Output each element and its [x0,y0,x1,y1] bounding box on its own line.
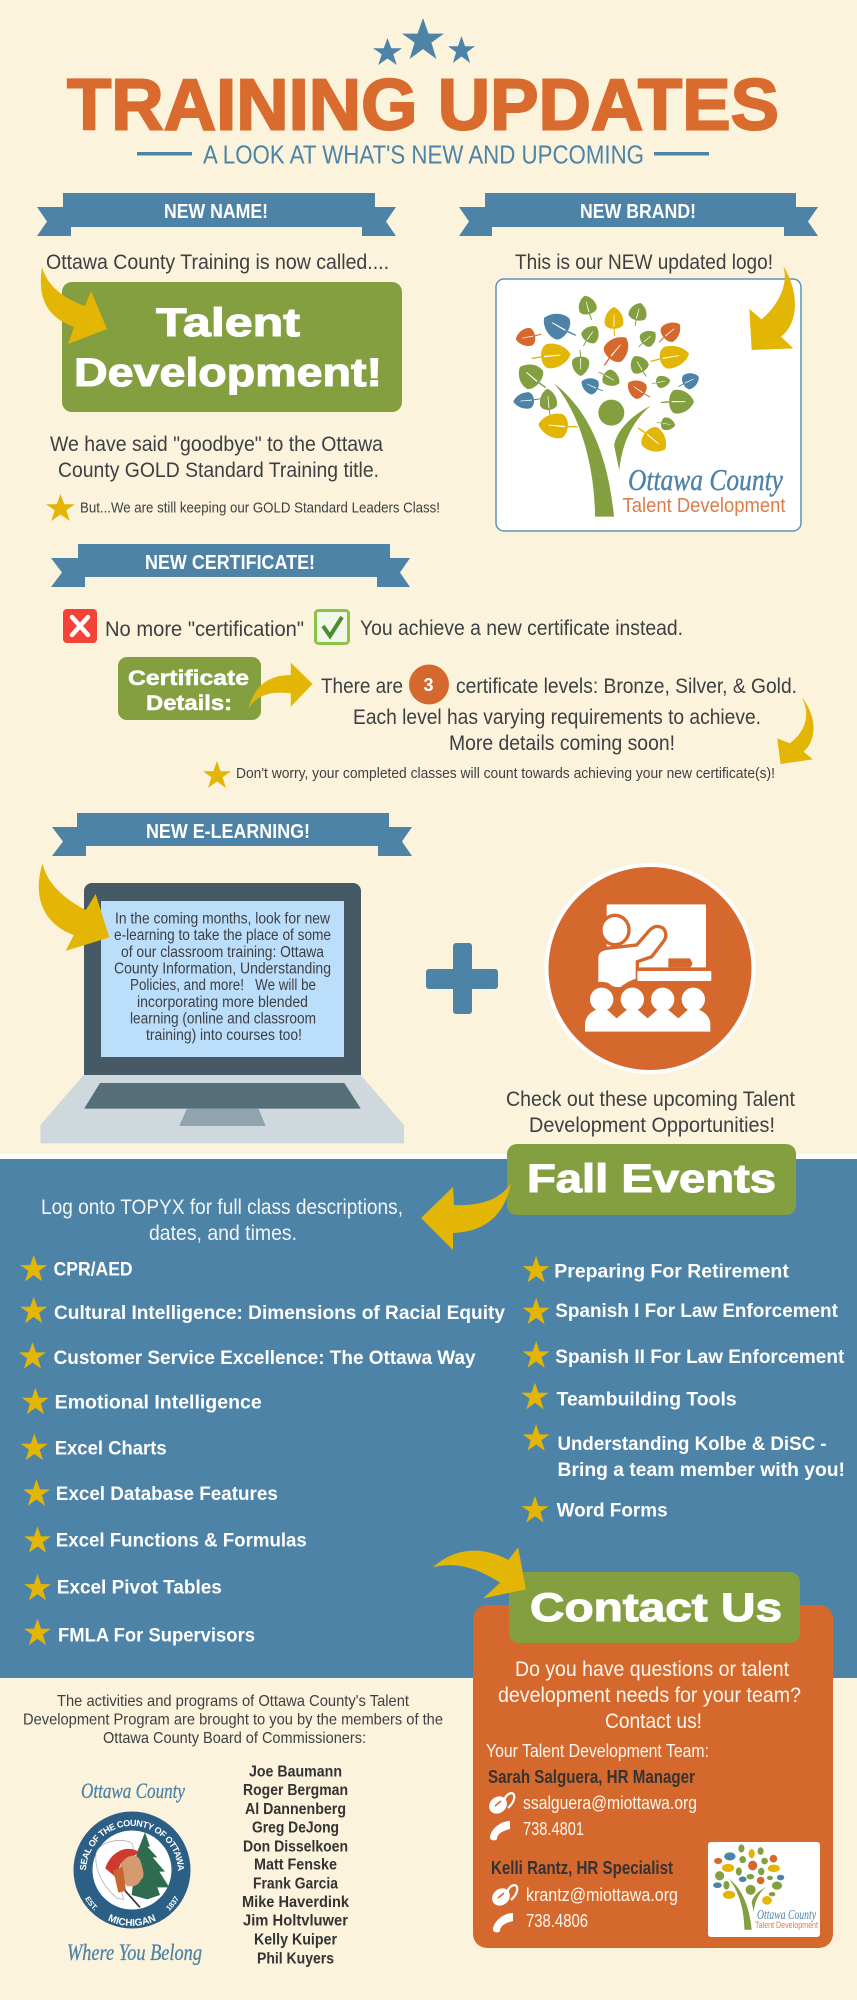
banner: new certificate [51,544,410,587]
heading: fall events: Fall Events [527,1157,776,1201]
text: no more certification: No more "certification" [105,618,304,641]
contact: sarah salguera: 738.4801 [523,1819,584,1839]
list: commissioners: Joe Baumann [249,1763,342,1780]
list: left column events: Excel Pivot Tables [57,1577,222,1598]
banner: new e-learning [52,813,412,856]
arrow: to laptop screen [39,863,109,951]
arrow: to logo [749,266,795,350]
text: program credit [23,1693,443,1747]
list: commissioners: Al Dannenberg [245,1801,346,1818]
list: commissioners: Don Disselkoen [243,1838,348,1855]
laptop illustration [40,883,404,1143]
logo tree [512,293,702,517]
contact: kelli rantz [489,1858,678,1932]
contact: sarah salguera: ssalguera@miottawa.org [523,1793,697,1813]
badge: 3: 3 [424,675,434,695]
green box: certificate details [118,657,261,720]
text: program credit: Development Program are brought to you by the members of the [23,1712,443,1728]
small logo card [708,1842,820,1937]
text: check out upcoming [506,1088,795,1137]
icon: three stars [373,18,475,65]
contact: kelli rantz: krantz@miottawa.org [526,1885,678,1905]
list: commissioners: Phil Kuyers [257,1950,334,1967]
panel: new certificate [51,544,814,788]
seal of ottawa county: EST. [85,1896,98,1911]
seal of ottawa county: 1837 [166,1896,178,1911]
text: contact question: Do you have questions or talent [515,1658,789,1681]
list: left column events: Excel Database Features [56,1484,278,1505]
text: certificate levels: certificate levels: Bronze, Silver, & Gold. [456,675,797,698]
contact: kelli rantz: Kelli Rantz, HR Specialist [491,1858,673,1878]
text: goodbye: We have said "goodbye" to the Ottawa [50,433,383,456]
banner: new name: NEW NAME! [164,201,268,223]
panel: board of commissioners footer [23,1693,443,1967]
list: right column events: Spanish II For Law Enforcement [555,1347,845,1368]
green box: certificate details: Certificate [128,667,249,690]
laptop screen text: Policies, and more! We will be [130,977,316,994]
icon: red x [63,609,97,643]
intro text: Ottawa County Training is now called.... [46,251,389,274]
text: goodbye [50,433,383,482]
text: new certificate: You achieve a new certificate instead. [360,617,683,640]
green box: certificate details: Details: [146,692,232,715]
text: program credit: The activities and programs of Ottawa County's Talent [57,1693,410,1710]
banner: new certificate: NEW CERTIFICATE! [145,552,315,574]
arrow: to talent development [41,267,107,344]
list: left column events: FMLA For Supervisors [58,1625,255,1646]
laptop screen text: of our classroom training: Ottawa [121,944,324,961]
laptop screen text: learning (online and classroom [130,1010,316,1028]
heading: contact us: Contact Us [530,1586,782,1630]
list: commissioners: Kelly Kuiper [254,1931,337,1948]
text: contact question: Contact us! [605,1710,702,1733]
arrow: to contact us [433,1547,526,1598]
list: right column events: Word Forms [557,1501,668,1522]
small logo text: Ottawa County [757,1908,817,1923]
logo text: Talent Development [622,495,786,517]
list: right column events: Spanish I For Law Enforcement [555,1301,839,1322]
text: ottawa county script: Ottawa County [81,1778,185,1803]
list: left column events: Emotional Intelligence [55,1393,262,1414]
text: certificate levels [321,664,797,755]
list: right column events: Understanding Kolbe & DiSC - [558,1434,826,1455]
badge: 3 [409,664,449,704]
icon: phone [493,1913,513,1932]
text: topyx: Log onto TOPYX for full class descriptions, [41,1196,403,1219]
note: gold standard leaders class [46,494,440,521]
panel: new name [37,193,440,521]
arrow: to topyx text [421,1183,511,1250]
note: gold standard leaders class: But...We are still keeping our GOLD Standard Leaders Class! [80,500,440,516]
logo text: Ottawa County [628,462,783,497]
text: contact question: development needs for your team? [498,1684,801,1707]
text: where you belong: Where You Belong [67,1940,202,1965]
contact: sarah salguera [486,1767,697,1840]
list: commissioners: Frank Garcia [253,1875,338,1892]
panel: new e-learning [39,813,795,1143]
text: contact question [498,1658,801,1733]
logo text [622,462,786,517]
icon: plus [426,943,498,1014]
small logo text: Talent Development [755,1920,818,1930]
text: certificate levels: Each level has varying requirements to achieve. [353,706,761,729]
text: certificate levels: There are [321,675,403,698]
text: certificate levels: More details coming soon! [449,732,675,755]
list: commissioners [242,1763,349,1967]
seal of ottawa county: SEAL OF THE COUNTY OF OTTAWA [80,1820,184,1871]
seal of ottawa county: MICHIGAN [108,1914,156,1926]
laptop screen text: e-learning to take the place of some [114,927,331,944]
text: team heading: Your Talent Development Team: [486,1741,709,1761]
laptop screen text: incorporating more blended [137,994,308,1011]
green box: talent development: Development! [74,351,382,395]
green box: talent development: Talent [156,301,300,345]
text: goodbye: County GOLD Standard Training title. [58,459,379,482]
green box: talent development [62,282,402,412]
seal of ottawa county [74,1812,190,1928]
arrow: to note [777,697,814,764]
note: completed classes [203,761,775,788]
list: right column events: Teambuilding Tools [557,1389,737,1410]
note: completed classes: Don't worry, your completed classes will count towards achieving your new certificate(s)! [236,765,775,782]
list: commissioners: Matt Fenske [254,1857,337,1874]
list: right column events [522,1256,845,1522]
banner: new e-learning: NEW E-LEARNING! [146,821,310,843]
banner: new brand [459,193,818,236]
banner: new brand: NEW BRAND! [580,201,696,223]
list: commissioners: Roger Bergman [243,1782,348,1799]
panel: contact us [433,1547,833,1948]
icon: green check [316,610,348,644]
logo card [496,279,801,531]
arrow: to certificate levels [249,663,313,708]
list: left column events: CPR/AED [54,1259,133,1280]
list: right column events: Bring a team member with you! [558,1460,845,1481]
list: right column events: Preparing For Retirement [554,1261,789,1282]
text: topyx: dates, and times. [149,1222,297,1245]
icon: classroom circle [544,863,756,1074]
contact: sarah salguera: Sarah Salguera, HR Manager [488,1767,695,1787]
title: TRAINING UPDATES [67,66,779,146]
list: left column events [19,1255,505,1646]
panel: fall events band [0,1144,857,1678]
list: left column events: Excel Charts [55,1439,167,1460]
list: left column events: Excel Functions & Formulas [56,1531,307,1552]
laptop screen text: County Information, Understanding [114,960,331,978]
text: check out upcoming: Check out these upcoming Talent [506,1088,795,1111]
heading: fall events [507,1144,796,1215]
list: commissioners: Jim Holtvluwer [243,1913,348,1930]
panel: new brand [459,193,818,531]
text: topyx [41,1196,403,1245]
intro text: This is our NEW updated logo! [515,251,773,274]
header: title block [67,18,779,170]
list: left column events: Customer Service Excellence: The Ottawa Way [54,1348,476,1369]
list: commissioners: Greg DeJong [252,1820,339,1837]
banner: new name [37,193,396,236]
laptop screen text: training) into courses too! [146,1027,302,1044]
text: program credit: Ottawa County Board of Commissioners: [103,1730,366,1747]
icon: phone [490,1821,510,1840]
list: left column events: Cultural Intelligence: Dimensions of Racial Equity [54,1303,505,1324]
list: commissioners: Mike Haverdink [242,1894,349,1911]
laptop screen text: In the coming months, look for new [115,910,331,928]
small logo text [755,1908,818,1930]
contact: kelli rantz: 738.4806 [526,1911,588,1931]
seal art: tree and chief [96,1832,169,1907]
subtitle: A LOOK AT WHAT'S NEW AND UPCOMING [203,140,644,170]
icon: email [489,1885,517,1909]
text: check out upcoming: Development Opportunities! [529,1114,775,1137]
heading: contact us [509,1572,800,1643]
laptop screen text [114,910,331,1044]
icon: email [486,1793,514,1817]
